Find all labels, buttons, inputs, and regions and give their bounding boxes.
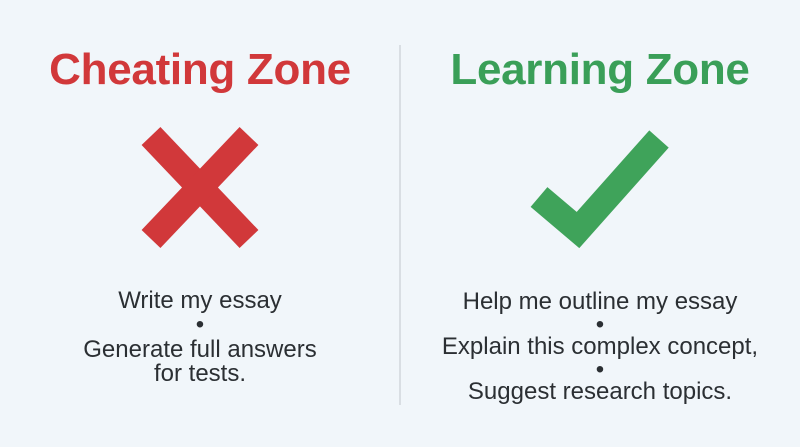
title: learning zone: Learning Zone bbox=[450, 45, 750, 94]
text: cheating examples: Write my essay bbox=[118, 287, 282, 314]
text: learning examples bbox=[442, 288, 758, 405]
text: learning examples: • bbox=[596, 310, 604, 338]
title: cheating zone: Cheating Zone bbox=[49, 45, 351, 94]
text: cheating examples: for tests. bbox=[154, 360, 246, 387]
divider bbox=[399, 45, 401, 405]
text: cheating examples: Generate full answers bbox=[83, 336, 317, 363]
text: cheating examples: • bbox=[196, 311, 204, 338]
text: learning examples: • bbox=[596, 356, 604, 382]
text: learning examples: Explain this complex concept, bbox=[442, 333, 758, 360]
text: learning examples: Help me outline my essay bbox=[463, 288, 737, 315]
text: learning examples: Suggest research topics. bbox=[468, 378, 732, 405]
text: cheating examples bbox=[83, 287, 317, 387]
